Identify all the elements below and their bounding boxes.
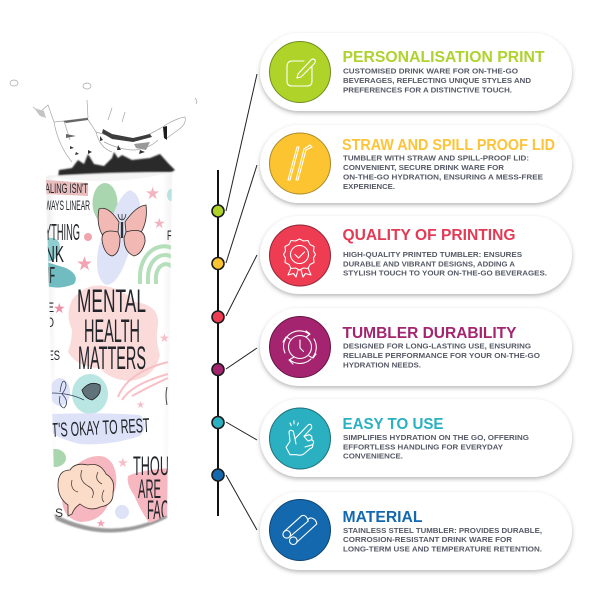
description [343,342,540,370]
description: LONG-TERM USE AND TEMPERATURE RETENTION. [343,544,542,554]
heading: STRAW AND SPILL PROOF LID [342,137,555,154]
tumbler base shadow [54,514,167,533]
thou are fa text [133,456,168,519]
tumbler [44,172,175,533]
icon: straws [270,133,330,194]
pink dot [84,233,92,241]
lilac band [50,413,145,444]
tumbler left text lines: E [47,299,54,315]
tumbler artwork: MATTERS [78,340,146,376]
tumbler left text lines: F [167,227,172,243]
icon: finger snap hand [270,408,330,469]
heading: QUALITY OF PRINTING [342,227,516,244]
description [343,526,542,554]
tumbler heading mental health matters [78,290,146,370]
heading: TUMBLER DURABILITY [342,325,517,342]
stars: ★ [145,184,160,204]
connector lines [226,74,257,530]
tumbler left text lines: NK [45,241,64,267]
description: SIMPLIFIES HYDRATION ON THE GO, OFFERING [343,433,529,442]
lower stars and dot: ★ [117,456,129,471]
top pink label band [46,180,88,196]
description: RELIABLE PERFORMANCE FOR YOUR ON-THE-GO [343,351,540,360]
tumbler artwork: S [55,506,63,520]
tumbler left text lines: ALING ISN'T [45,180,88,196]
icon: award rosette [270,225,330,286]
panel: straw and spill proof lid [260,125,572,203]
tumbler rim shading [47,172,172,181]
description: HYDRATION NEEDS. [343,360,421,370]
tumbler heading mental health matters: HEALTH [84,313,140,349]
heading: EASY TO USE [342,416,444,433]
lilac blob [97,190,140,285]
tumbler artwork: ★ [159,331,170,345]
tumbler left text lines: IES [45,347,60,363]
thou are fa text: ARE [138,474,161,504]
tumbler artwork: THOU [133,451,169,481]
lilac and teal flower blobs [50,378,70,406]
tumbler artwork: ★ [96,517,106,530]
icon: steel tubes [270,500,330,560]
description: CORROSION-RESISTANT DRINK WARE FOR [343,535,513,544]
tumbler artwork: ★ [76,253,93,275]
pink blob behind heading [68,286,160,381]
description: ON-THE-GO HYDRATION, ENSURING A MESS-FREE [343,172,543,182]
description: EXPERIENCE. [343,182,395,191]
rainbow [140,246,172,284]
tumbler left text lines: YTHING [45,219,80,245]
description [343,154,543,191]
panel: quality of printing [260,216,572,294]
description [343,433,529,460]
panel: tumbler durability [260,308,572,386]
timeline dots [212,205,224,481]
tumbler artwork: ★ [153,216,166,232]
panel: material [260,492,572,570]
panel: easy to use [260,399,572,477]
it's okay to rest: T'S OKAY TO REST [51,415,150,442]
pink swooshes [118,362,168,400]
tumbler heading mental health matters: MENTAL [77,283,146,319]
description: HIGH-QUALITY PRINTED TUMBLER: ENSURES [343,250,522,259]
timeline [212,74,257,530]
dark flower [82,383,100,400]
description: CONVENIENT, SECURE DRINK WARE FOR [343,163,505,172]
description: EFFORTLESS HANDLING FOR EVERYDAY [343,442,503,452]
teal dot [167,189,172,201]
tumbler artwork [44,180,175,530]
butterfly [98,205,146,256]
description: DURABLE AND VIBRANT DESIGNS, ADDING A [343,260,516,268]
big pink blob [62,456,116,522]
description [343,66,532,94]
top left teal blobs [48,238,60,262]
icon: clock with arrows [270,316,330,378]
dark water surface [58,152,175,179]
tumbler artwork: FAC [147,495,169,525]
tumbler left text lines [45,180,172,363]
icon: edit note [270,42,330,102]
right pink blob [128,468,168,523]
tumbler artwork: ★ [136,400,145,411]
green blob lower [53,449,66,467]
panel: personalisation print [260,33,572,111]
description: STAINLESS STEEL TUMBLER: PROVIDES DURABLE, [343,526,542,535]
tumbler left text lines: D [47,314,54,330]
heading: PERSONALISATION PRINT [342,49,545,66]
brain [58,464,114,516]
water splash [10,80,197,179]
description: CONVENIENCE. [343,452,403,460]
tumbler left text lines: IF [47,262,55,288]
description: CUSTOMISED DRINK WARE FOR ON-THE-GO [343,66,518,76]
description: TUMBLER WITH STRAW AND SPILL-PROOF LID: [343,154,529,162]
description [343,250,547,278]
description: BEVERAGES, REFLECTING UNIQUE STYLES AND [343,76,532,85]
flower sprig [52,381,84,408]
star: ★ [53,301,66,317]
heading: MATERIAL [342,509,422,526]
tumbler left text lines: WAYS LINEAR [45,197,90,213]
green blob [92,183,118,223]
description: DESIGNED FOR LONG-LASTING USE, ENSURING [343,342,531,350]
description: STYLISH TOUCH TO YOUR ON-THE-GO BEVERAGES. [343,268,547,278]
description: PREFERENCES FOR A DISTINCTIVE TOUCH. [343,86,512,94]
dark arc right [166,387,167,405]
